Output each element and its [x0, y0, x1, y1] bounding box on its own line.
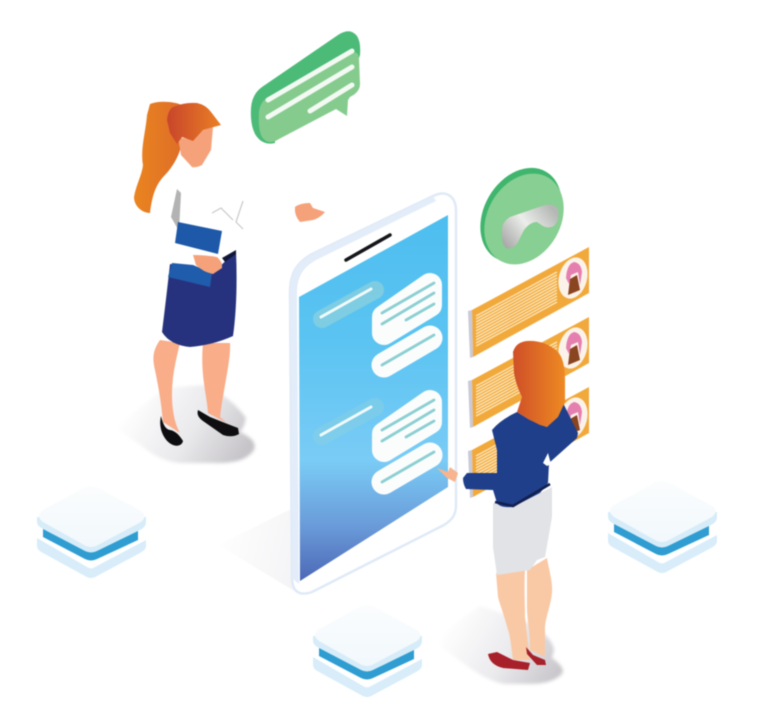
jacket [463, 403, 578, 507]
folder top [175, 222, 222, 254]
speaker [346, 235, 390, 260]
phone [290, 194, 456, 594]
second woman floor shadow [432, 606, 563, 684]
screen [299, 215, 448, 581]
phone shadow [218, 508, 296, 592]
legs [153, 340, 180, 433]
hand [437, 467, 458, 482]
folder bottom [168, 263, 212, 287]
received chat 1 [321, 289, 375, 319]
skirt [162, 251, 237, 347]
platform: bottom left [37, 486, 146, 578]
belt [222, 250, 236, 262]
sent bubble 1 [382, 283, 434, 333]
belt [495, 484, 550, 506]
shoes [160, 416, 183, 446]
shoes [488, 652, 530, 670]
speech bubble: green [251, 31, 360, 144]
sent bubble 3 [382, 400, 434, 450]
first woman floor shadow [115, 385, 255, 463]
platform: bottom centre [313, 605, 422, 697]
arm hand [193, 255, 222, 274]
first woman [134, 102, 243, 446]
shirt sleeve shade [171, 189, 181, 231]
received chat 2 [321, 407, 375, 436]
second woman [437, 341, 578, 670]
sent bubble 2 [382, 335, 434, 365]
orange profile card 1 [468, 247, 592, 358]
legs [496, 570, 530, 660]
skirt [493, 487, 552, 575]
green phone icon [464, 153, 580, 279]
ponytail [134, 102, 182, 213]
floating hand [295, 203, 325, 222]
hair [167, 103, 221, 144]
blouse gap [543, 453, 551, 466]
orange profile card 3 [468, 387, 592, 498]
face [178, 127, 213, 167]
shirt folds [212, 201, 243, 229]
orange profile card 2 [468, 317, 592, 428]
hair [513, 341, 565, 427]
sent bubble 4 [382, 452, 434, 482]
platform: bottom right [608, 481, 717, 573]
